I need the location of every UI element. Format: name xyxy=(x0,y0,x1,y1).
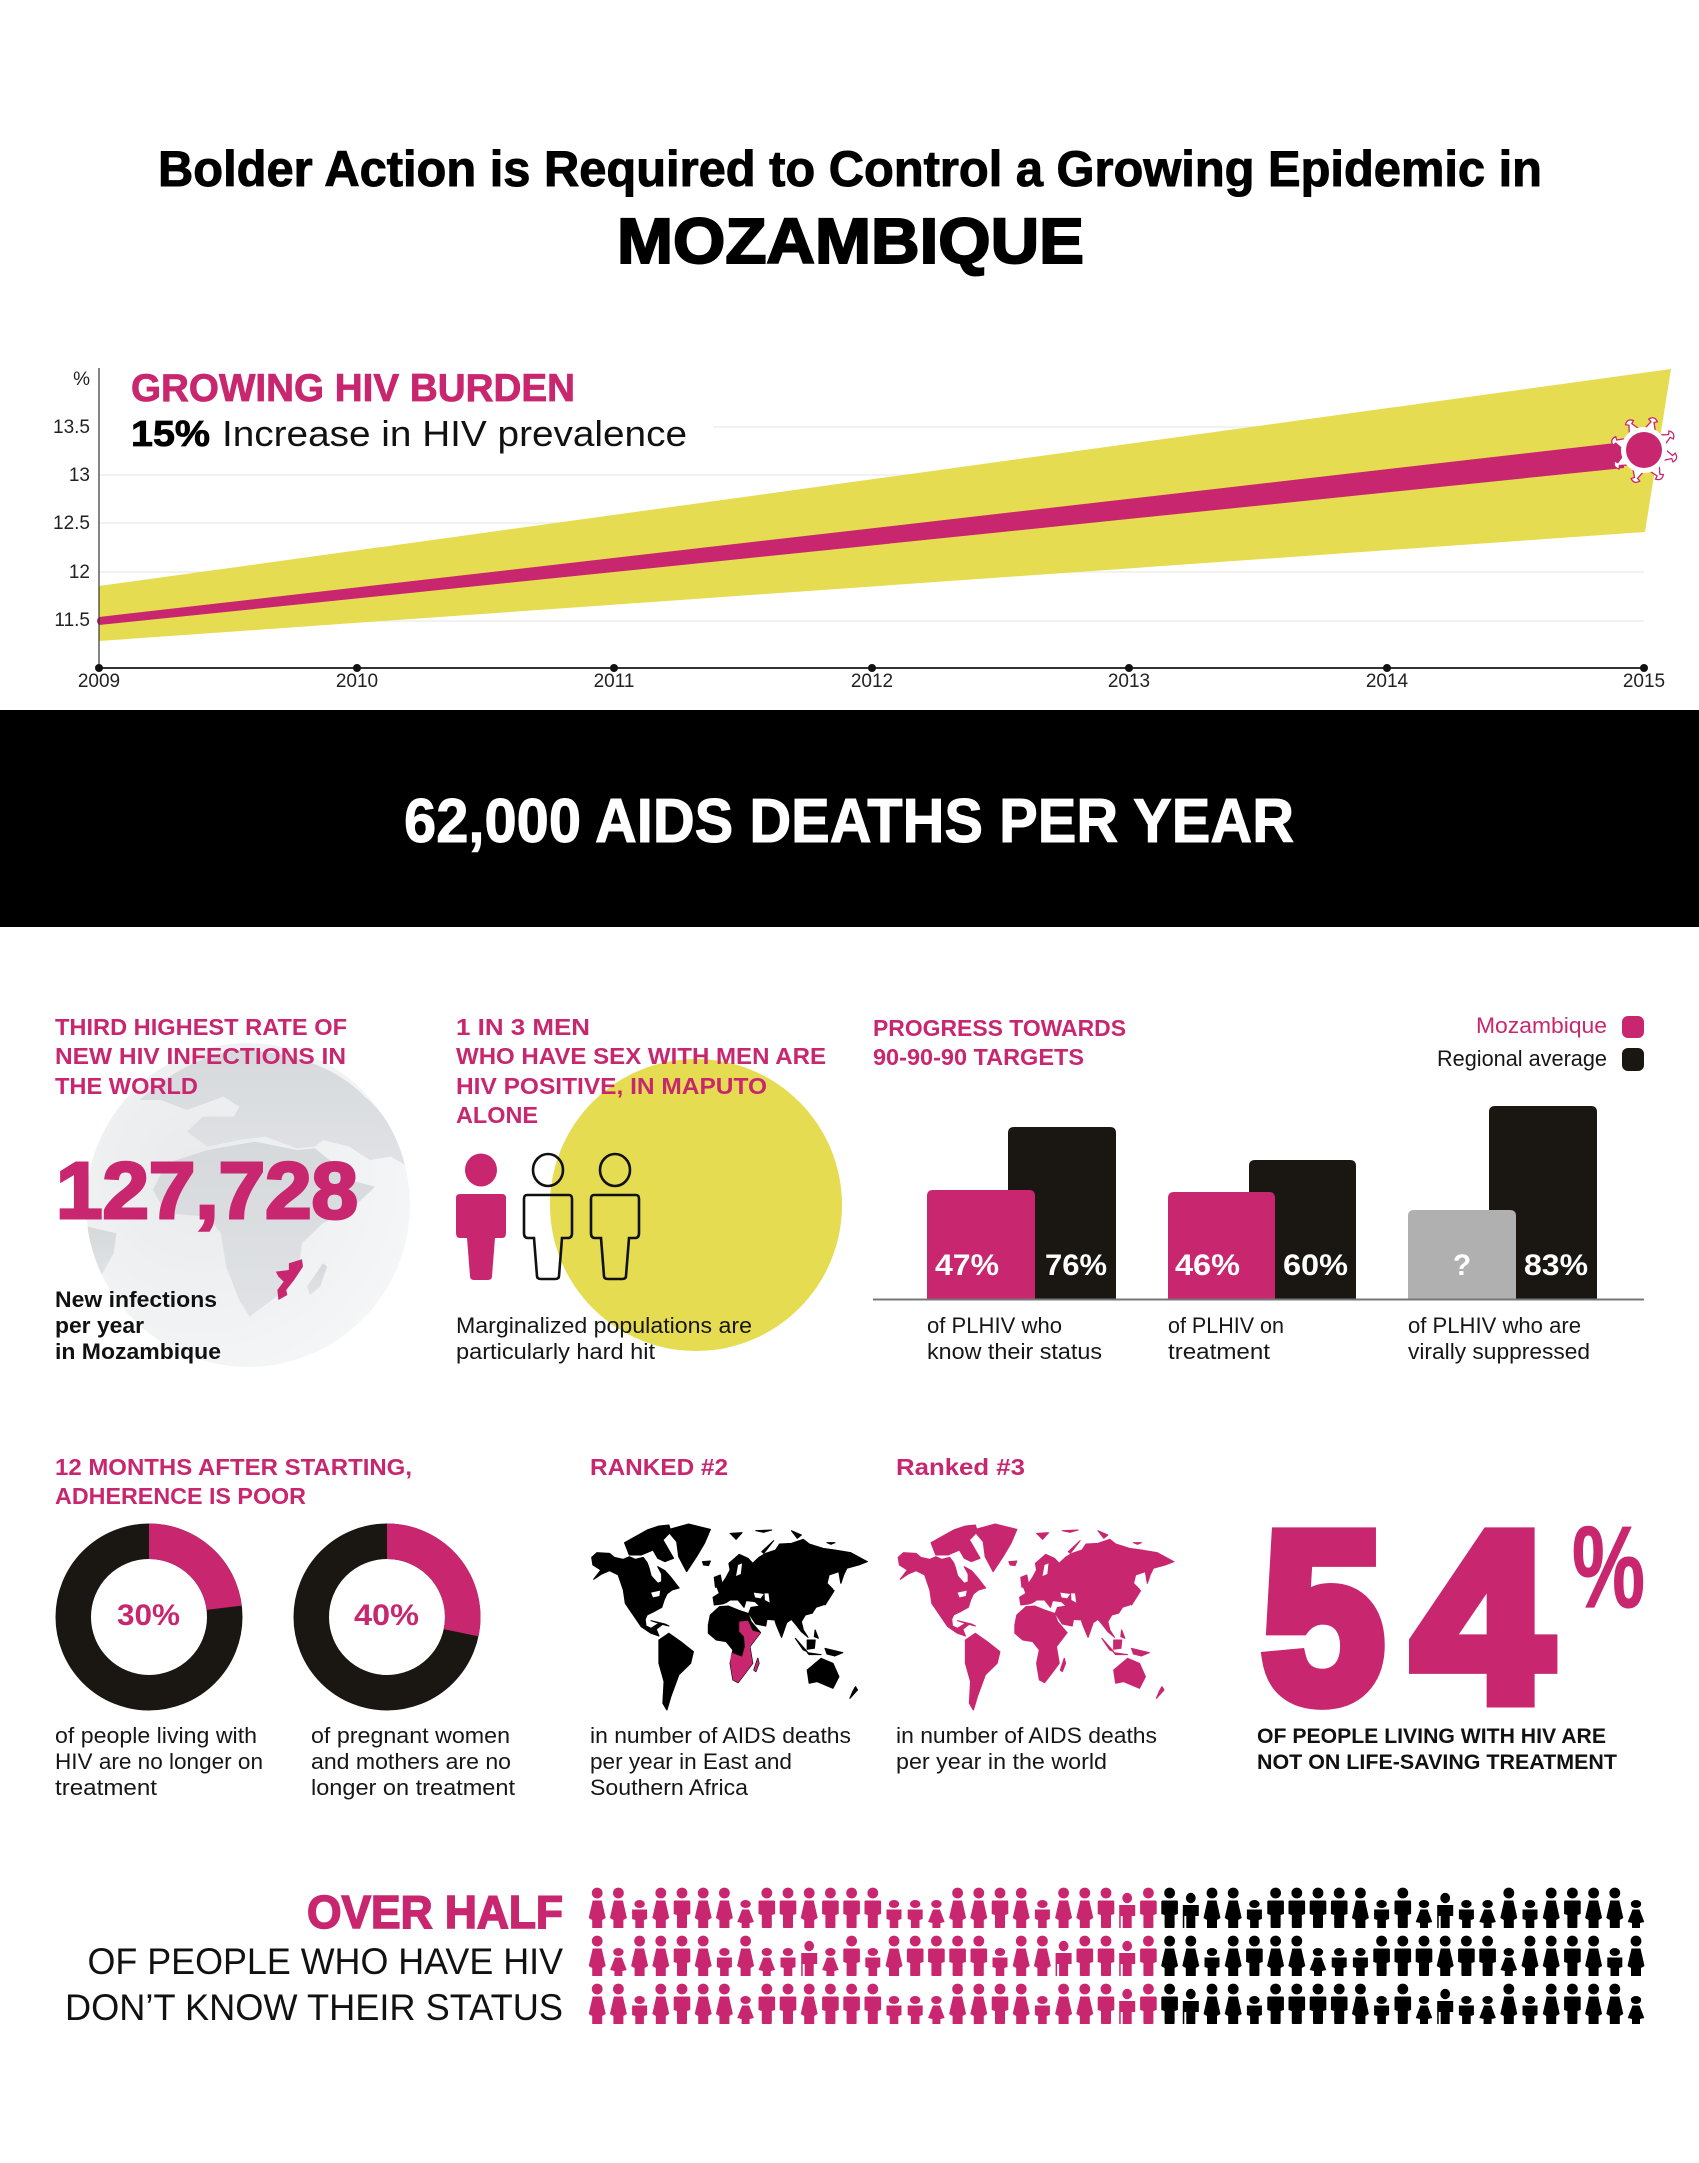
bar chart: 60% xyxy=(1283,1249,1348,1282)
heading: 12 MONTHS AFTER STARTING, xyxy=(55,1454,412,1480)
uncertainty band xyxy=(99,369,1671,641)
big number: 5 xyxy=(1262,1483,1384,1751)
panel: 54 percent xyxy=(1257,1483,1645,1774)
heading: ADHERENCE IS POOR xyxy=(55,1483,306,1509)
axes xyxy=(95,368,1648,672)
x axis labels: 2013 xyxy=(1108,671,1150,692)
panel: over half xyxy=(65,1886,1644,2028)
caption xyxy=(456,1313,752,1364)
bar captions: of PLHIV who are xyxy=(1408,1313,1581,1338)
caption: per year xyxy=(55,1313,144,1338)
icon: filled person xyxy=(456,1154,506,1280)
caption xyxy=(55,1287,221,1364)
black banner: 62,000 AIDS DEATHS PER YEAR xyxy=(404,787,1294,856)
caption: per year in the world xyxy=(896,1749,1107,1774)
x axis labels: 2009 xyxy=(78,671,120,692)
icon: virus xyxy=(1610,416,1678,484)
caption: per year in East and xyxy=(590,1749,792,1774)
bar captions xyxy=(927,1313,1590,1364)
bar chart xyxy=(873,1106,1644,1300)
y axis labels xyxy=(53,369,90,631)
heading xyxy=(65,1886,563,2028)
pictogram row 2 xyxy=(589,1936,1645,1976)
heading: OF PEOPLE WHO HAVE HIV xyxy=(88,1941,563,1982)
y axis labels: % xyxy=(73,369,90,390)
heading xyxy=(456,1014,826,1128)
panel: 90-90-90 progress xyxy=(873,1013,1644,1364)
chart heading: 15% xyxy=(131,413,210,454)
donut chart: 40% xyxy=(311,1524,481,1693)
caption: in number of AIDS deaths xyxy=(590,1723,851,1748)
pictogram row 3 xyxy=(589,1984,1644,2024)
big number xyxy=(1262,1483,1551,1751)
bar chart: 47% xyxy=(935,1249,999,1282)
black banner xyxy=(0,710,1699,927)
icon: outlined person xyxy=(591,1154,639,1279)
chart heading: GROWING HIV BURDEN xyxy=(131,367,575,410)
heading: 1 IN 3 MEN xyxy=(456,1014,590,1040)
heading xyxy=(873,1015,1126,1070)
icon: globe xyxy=(86,1043,410,1367)
title xyxy=(158,141,1542,277)
percent sign: % xyxy=(1572,1502,1645,1632)
big number: 4 xyxy=(1413,1483,1551,1751)
caption: NOT ON LIFE-SAVING TREATMENT xyxy=(1257,1750,1617,1774)
caption xyxy=(896,1723,1157,1774)
caption: 40% xyxy=(311,1723,515,1800)
panel: ranked #2 xyxy=(590,1454,867,1800)
heading: HIV POSITIVE, IN MAPUTO xyxy=(456,1073,767,1099)
caption: New infections xyxy=(55,1287,217,1312)
title: MOZAMBIQUE xyxy=(617,205,1084,277)
y axis labels: 12 xyxy=(69,562,90,583)
bar captions: of PLHIV on xyxy=(1168,1313,1284,1338)
legend: Mozambique xyxy=(1476,1013,1607,1038)
legend: Regional average xyxy=(1437,1046,1607,1071)
caption: in Mozambique xyxy=(55,1339,221,1364)
title: Bolder Action is Required to Control a Growing Epidemic in xyxy=(158,141,1542,197)
y axis labels: 13 xyxy=(69,465,90,486)
heading: ALONE xyxy=(456,1102,538,1128)
icon: outlined person xyxy=(524,1154,572,1279)
heading xyxy=(55,1454,412,1509)
panel: adherence xyxy=(55,1454,515,1800)
x axis labels: 2012 xyxy=(851,671,893,692)
bar captions: know their status xyxy=(927,1339,1102,1364)
x axis labels xyxy=(78,671,1665,692)
bar captions: treatment xyxy=(1168,1339,1270,1364)
caption xyxy=(590,1723,851,1800)
caption: 30% xyxy=(55,1723,263,1800)
heading: THE WORLD xyxy=(55,1073,198,1099)
pictogram row 1 xyxy=(589,1888,1644,1928)
heading: Ranked #3 xyxy=(896,1454,1025,1480)
bar chart: 46% xyxy=(1175,1249,1240,1282)
line chart: growing HIV burden xyxy=(53,367,1678,692)
x axis labels: 2011 xyxy=(594,671,634,692)
yellow circle xyxy=(550,1059,842,1351)
donut chart: 30% xyxy=(73,1524,242,1693)
caption: Southern Africa xyxy=(590,1775,749,1800)
y axis labels: 12.5 xyxy=(53,513,90,534)
caption xyxy=(1257,1724,1617,1774)
caption: 40%: of pregnant women xyxy=(311,1723,510,1748)
bar chart: ? xyxy=(1453,1249,1471,1282)
donut chart: 30%: 30% xyxy=(117,1599,180,1632)
legend xyxy=(1437,1013,1644,1071)
caption: in number of AIDS deaths xyxy=(896,1723,1157,1748)
caption: Marginalized populations are xyxy=(456,1313,752,1338)
heading: RANKED #2 xyxy=(590,1454,728,1480)
heading: WHO HAVE SEX WITH MEN ARE xyxy=(456,1043,826,1069)
big number: 127,728 xyxy=(56,1146,358,1235)
bar captions: of PLHIV who xyxy=(927,1313,1062,1338)
bar chart: 83% xyxy=(1524,1249,1588,1282)
bar captions: virally suppressed xyxy=(1408,1339,1590,1364)
x axis labels: 2014 xyxy=(1366,671,1409,692)
heading: NEW HIV INFECTIONS IN xyxy=(55,1043,346,1069)
heading xyxy=(55,1014,347,1099)
panel: third highest rate xyxy=(55,1014,410,1367)
map: world xyxy=(898,1524,1174,1710)
heading: PROGRESS TOWARDS xyxy=(873,1015,1126,1041)
heading: OVER HALF xyxy=(307,1886,563,1938)
heading: 90-90-90 TARGETS xyxy=(873,1044,1084,1070)
caption: 30%: HIV are no longer on xyxy=(55,1749,263,1774)
caption: 30%: treatment xyxy=(55,1775,157,1800)
x axis labels: 2010 xyxy=(336,671,378,692)
y axis labels: 11.5 xyxy=(54,610,90,631)
map: East and Southern Africa highlighted xyxy=(592,1524,867,1710)
caption: OF PEOPLE LIVING WITH HIV ARE xyxy=(1257,1724,1606,1748)
panel: ranked #3 xyxy=(896,1454,1174,1774)
bar chart: 76% xyxy=(1045,1249,1107,1282)
prevalence line xyxy=(97,442,1624,625)
y axis labels: 13.5 xyxy=(53,417,90,438)
panel: 1 in 3 men xyxy=(456,1014,842,1364)
heading: THIRD HIGHEST RATE OF xyxy=(55,1014,347,1040)
caption: 40%: longer on treatment xyxy=(311,1775,515,1800)
caption: 30%: of people living with xyxy=(55,1723,257,1748)
donut chart: 40%: 40% xyxy=(354,1599,419,1632)
x axis labels: 2015 xyxy=(1623,671,1665,692)
caption: particularly hard hit xyxy=(456,1339,655,1364)
caption: 40%: and mothers are no xyxy=(311,1749,511,1774)
chart heading: Increase in HIV prevalence xyxy=(222,413,687,454)
chart heading xyxy=(131,367,687,454)
heading: DON’T KNOW THEIR STATUS xyxy=(65,1987,563,2028)
